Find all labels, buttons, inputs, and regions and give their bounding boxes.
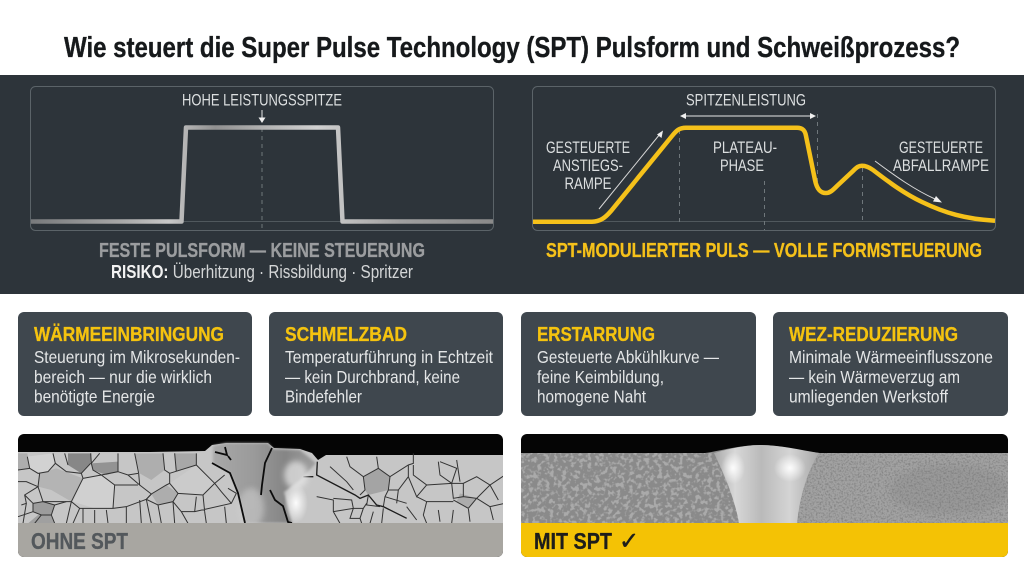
grains left of weld xyxy=(18,453,236,523)
card: WEZ-Reduzierung: umliegenden Werkstoff xyxy=(789,386,948,406)
label: falling ramp: GESTEUERTE xyxy=(899,138,983,157)
card: Schmelzbad: — kein Durchbrand, keine xyxy=(285,367,460,387)
card: Schmelzbad: SCHMELZBAD xyxy=(285,324,407,346)
card: Erstarrung: homogene Naht xyxy=(537,386,646,406)
arrow: rising ramp xyxy=(599,130,663,209)
arrow: falling ramp xyxy=(875,161,942,202)
card: Erstarrung xyxy=(521,312,756,416)
weld zone xyxy=(213,443,316,523)
cellular grain texture xyxy=(521,453,746,523)
label: falling ramp: ABFALLRAMPE xyxy=(893,156,989,175)
label bar: mit SPT: ✓ xyxy=(619,527,639,555)
label: rising ramp: ANSTIEGS- xyxy=(553,156,623,175)
fixed pulse line xyxy=(31,128,493,222)
card: WEZ-Reduzierung: WEZ-REDUZIERUNG xyxy=(789,324,958,346)
card: Schmelzbad xyxy=(269,312,503,416)
card: Wärmeeinbringung: WÄRMEEINBRINGUNG xyxy=(34,323,224,346)
heading: fixed pulse: FESTE PULSFORM — KEINE STEUERUNG xyxy=(99,240,425,262)
panel: micrograph with SPT xyxy=(521,434,1010,557)
card: Wärmeeinbringung xyxy=(18,312,252,416)
panel: micrograph without SPT xyxy=(18,434,505,557)
label: peak power span: SPITZENLEISTUNG xyxy=(686,90,806,110)
card: Wärmeeinbringung: Steuerung im Mikrosekunden- xyxy=(34,347,240,367)
label: plateau phase: PLATEAU- xyxy=(713,138,777,157)
label bar: mit SPT xyxy=(521,523,1008,557)
grains right of weld xyxy=(298,453,505,523)
SPT pulse curve xyxy=(533,128,995,222)
label: plateau phase: PHASE xyxy=(720,156,764,175)
bead highlights xyxy=(722,455,804,481)
fine grain texture xyxy=(790,453,1008,523)
base metal xyxy=(18,443,503,523)
darker patch xyxy=(894,469,1005,508)
label: rising ramp: RAMPE xyxy=(564,174,612,193)
card: Wärmeeinbringung: bereich — nur die wirklich xyxy=(34,367,212,387)
weld cracks xyxy=(212,447,292,523)
panel: pulse comparison band xyxy=(0,75,1024,294)
arrow: peak span xyxy=(680,113,816,119)
card: Erstarrung: ERSTARRUNG xyxy=(537,324,655,346)
label: rising ramp: GESTEUERTE xyxy=(546,138,630,157)
panel: fixed pulse chart xyxy=(30,86,494,230)
arrow: peak power xyxy=(258,110,266,123)
panel: SPT pulse chart xyxy=(532,86,996,230)
weld bead xyxy=(714,445,819,523)
risk text: RISIKO: Überhitzung · Rissbildung · Spritzer xyxy=(111,261,413,282)
base metal xyxy=(521,445,820,523)
label bar: ohne SPT: OHNE SPT xyxy=(31,528,128,554)
card: Schmelzbad: Bindefehler xyxy=(285,386,362,406)
card: WEZ-Reduzierung xyxy=(773,312,1008,416)
label bar: mit SPT: MIT SPT xyxy=(534,528,612,554)
card: WEZ-Reduzierung: — kein Wärmeverzug am xyxy=(789,367,960,387)
label bar: ohne SPT xyxy=(18,523,503,557)
card: Wärmeeinbringung: benötigte Energie xyxy=(34,386,155,406)
card: Schmelzbad: Temperaturführung in Echtzeit xyxy=(285,347,493,367)
weld highlights xyxy=(238,461,308,528)
card: WEZ-Reduzierung: Minimale Wärmeeinflusszone xyxy=(789,347,993,367)
card: Erstarrung: feine Keimbildung, xyxy=(537,367,664,387)
label: peak power: HOHE LEISTUNGSSPITZE xyxy=(182,90,342,110)
card: Erstarrung: Gesteuerte Abkühlkurve — xyxy=(537,347,719,367)
